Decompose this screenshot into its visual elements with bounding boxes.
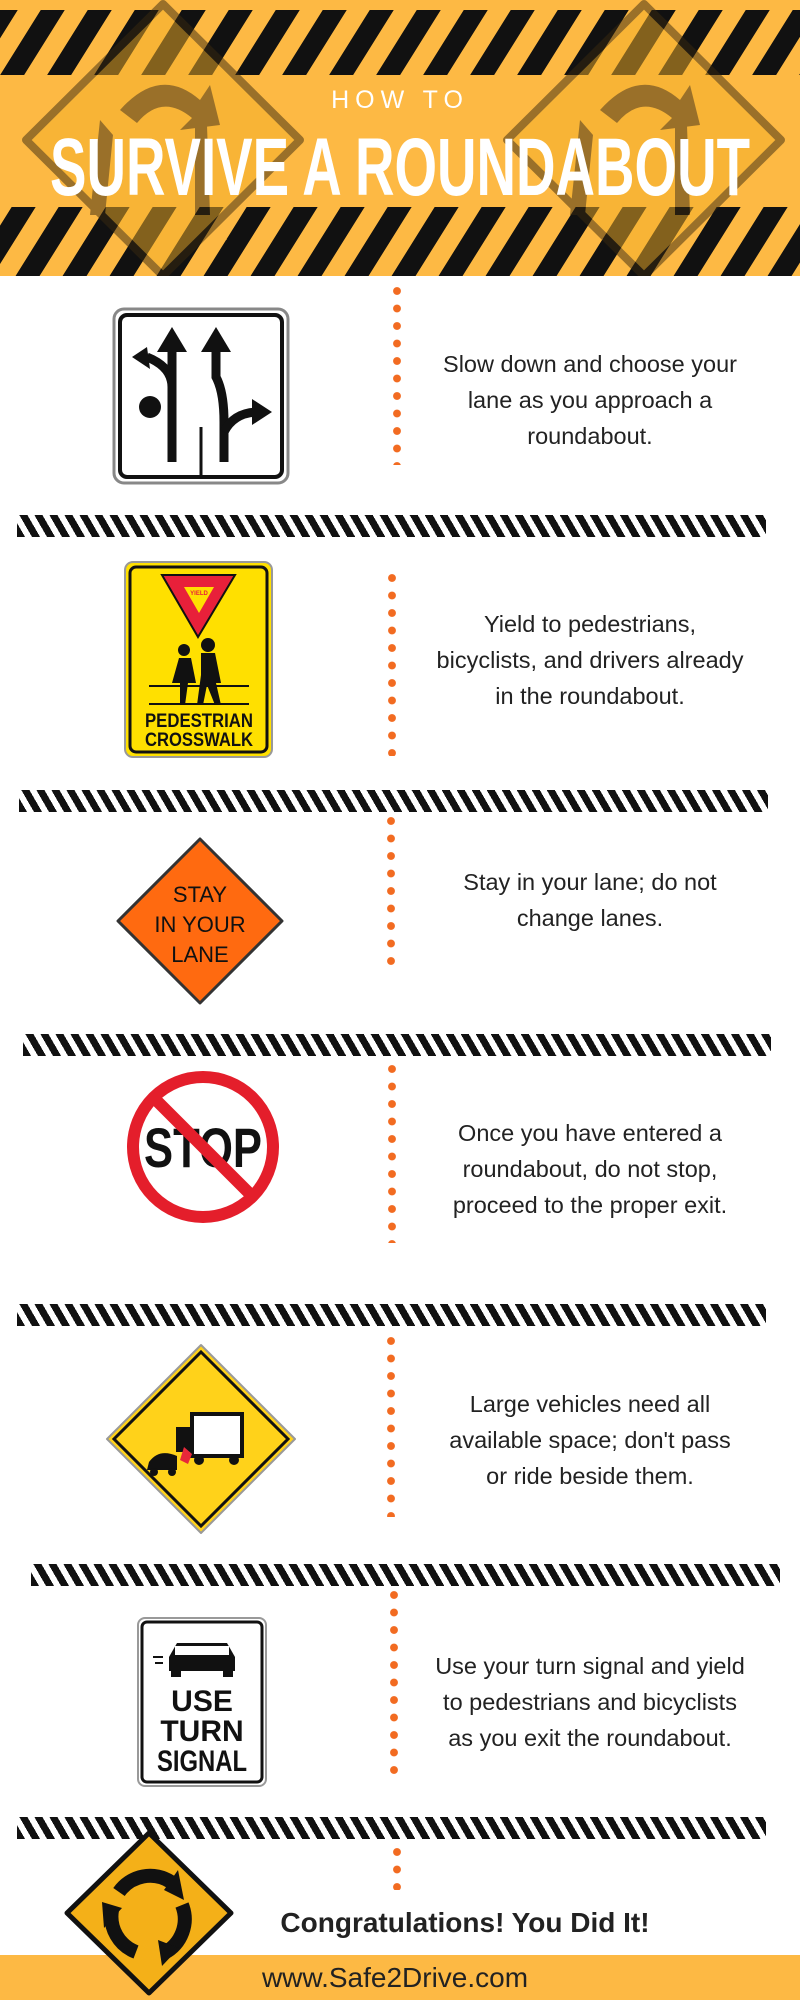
step 4 text: Once you have entered a (458, 1120, 722, 1146)
footer bar (0, 1955, 800, 2000)
step 5 dots (387, 1337, 395, 1517)
step 2 sign: pedestrian crosswalk: PEDESTRIAN (145, 711, 253, 732)
step 2 sign: pedestrian crosswalk (124, 561, 273, 758)
website: www.Safe2Drive.com (262, 1962, 528, 1993)
header banner (0, 0, 800, 276)
step 5 text: or ride beside them. (486, 1463, 694, 1489)
step 4 dots (388, 1065, 396, 1243)
step 6 text: as you exit the roundabout. (448, 1725, 732, 1751)
step 2 text: bicyclists, and drivers already (437, 647, 743, 673)
step 5 sign: large vehicles (106, 1344, 296, 1534)
step 1 text (443, 351, 737, 449)
background sign left (26, 4, 300, 276)
final dots (393, 1848, 401, 1890)
step 1 text: Slow down and choose your (443, 351, 737, 377)
step 2 sign: pedestrian crosswalk: CROSSWALK (145, 730, 253, 751)
step 5 text (449, 1391, 731, 1489)
step 2 text: Yield to pedestrians, (484, 611, 696, 637)
step 4 text: proceed to the proper exit. (453, 1192, 727, 1218)
congratulations: Congratulations! You Did It! (280, 1907, 650, 1938)
step 3 text (463, 869, 717, 931)
step 6 text: Use your turn signal and yield (435, 1653, 745, 1679)
step 4 text (453, 1120, 727, 1218)
step 3 dots (387, 817, 395, 967)
step 3 text: change lanes. (517, 905, 663, 931)
step 3 sign: stay in your lane: IN YOUR (154, 912, 246, 937)
step 6 sign: use turn signal: TURN (160, 1715, 244, 1748)
step 3 sign: stay in your lane (116, 837, 284, 1005)
step 3 sign: stay in your lane: STAY (173, 882, 227, 907)
step 6 sign: use turn signal: SIGNAL (157, 1745, 247, 1778)
step 1 text: roundabout. (527, 423, 653, 449)
step 2 text (437, 611, 744, 709)
step 1 sign: lane sign (112, 308, 290, 484)
step 1 dots (393, 287, 401, 465)
background sign right (507, 4, 781, 276)
step 1 text: lane as you approach a (468, 387, 712, 413)
step 6 text (435, 1653, 745, 1751)
step 6 sign: use turn signal: USE (171, 1685, 233, 1718)
step 3 sign: stay in your lane: LANE (171, 942, 229, 967)
step 6 dots (390, 1591, 398, 1781)
step 4 text: roundabout, do not stop, (463, 1156, 717, 1182)
subtitle: HOW TO (331, 86, 469, 114)
step 6 text: to pedestrians and bicyclists (443, 1689, 737, 1715)
step 6 sign: use turn signal (137, 1617, 267, 1787)
step 2 sign: pedestrian crosswalk: YIELD (190, 591, 208, 597)
step 5 text: available space; don't pass (449, 1427, 731, 1453)
roundabout sign (64, 1831, 234, 1996)
step 3 text: Stay in your lane; do not (463, 869, 717, 895)
step 4 sign: no stop (127, 1071, 279, 1223)
step 2 dots (388, 574, 396, 756)
step 2 text: in the roundabout. (495, 683, 685, 709)
step 5 text: Large vehicles need all (470, 1391, 710, 1417)
